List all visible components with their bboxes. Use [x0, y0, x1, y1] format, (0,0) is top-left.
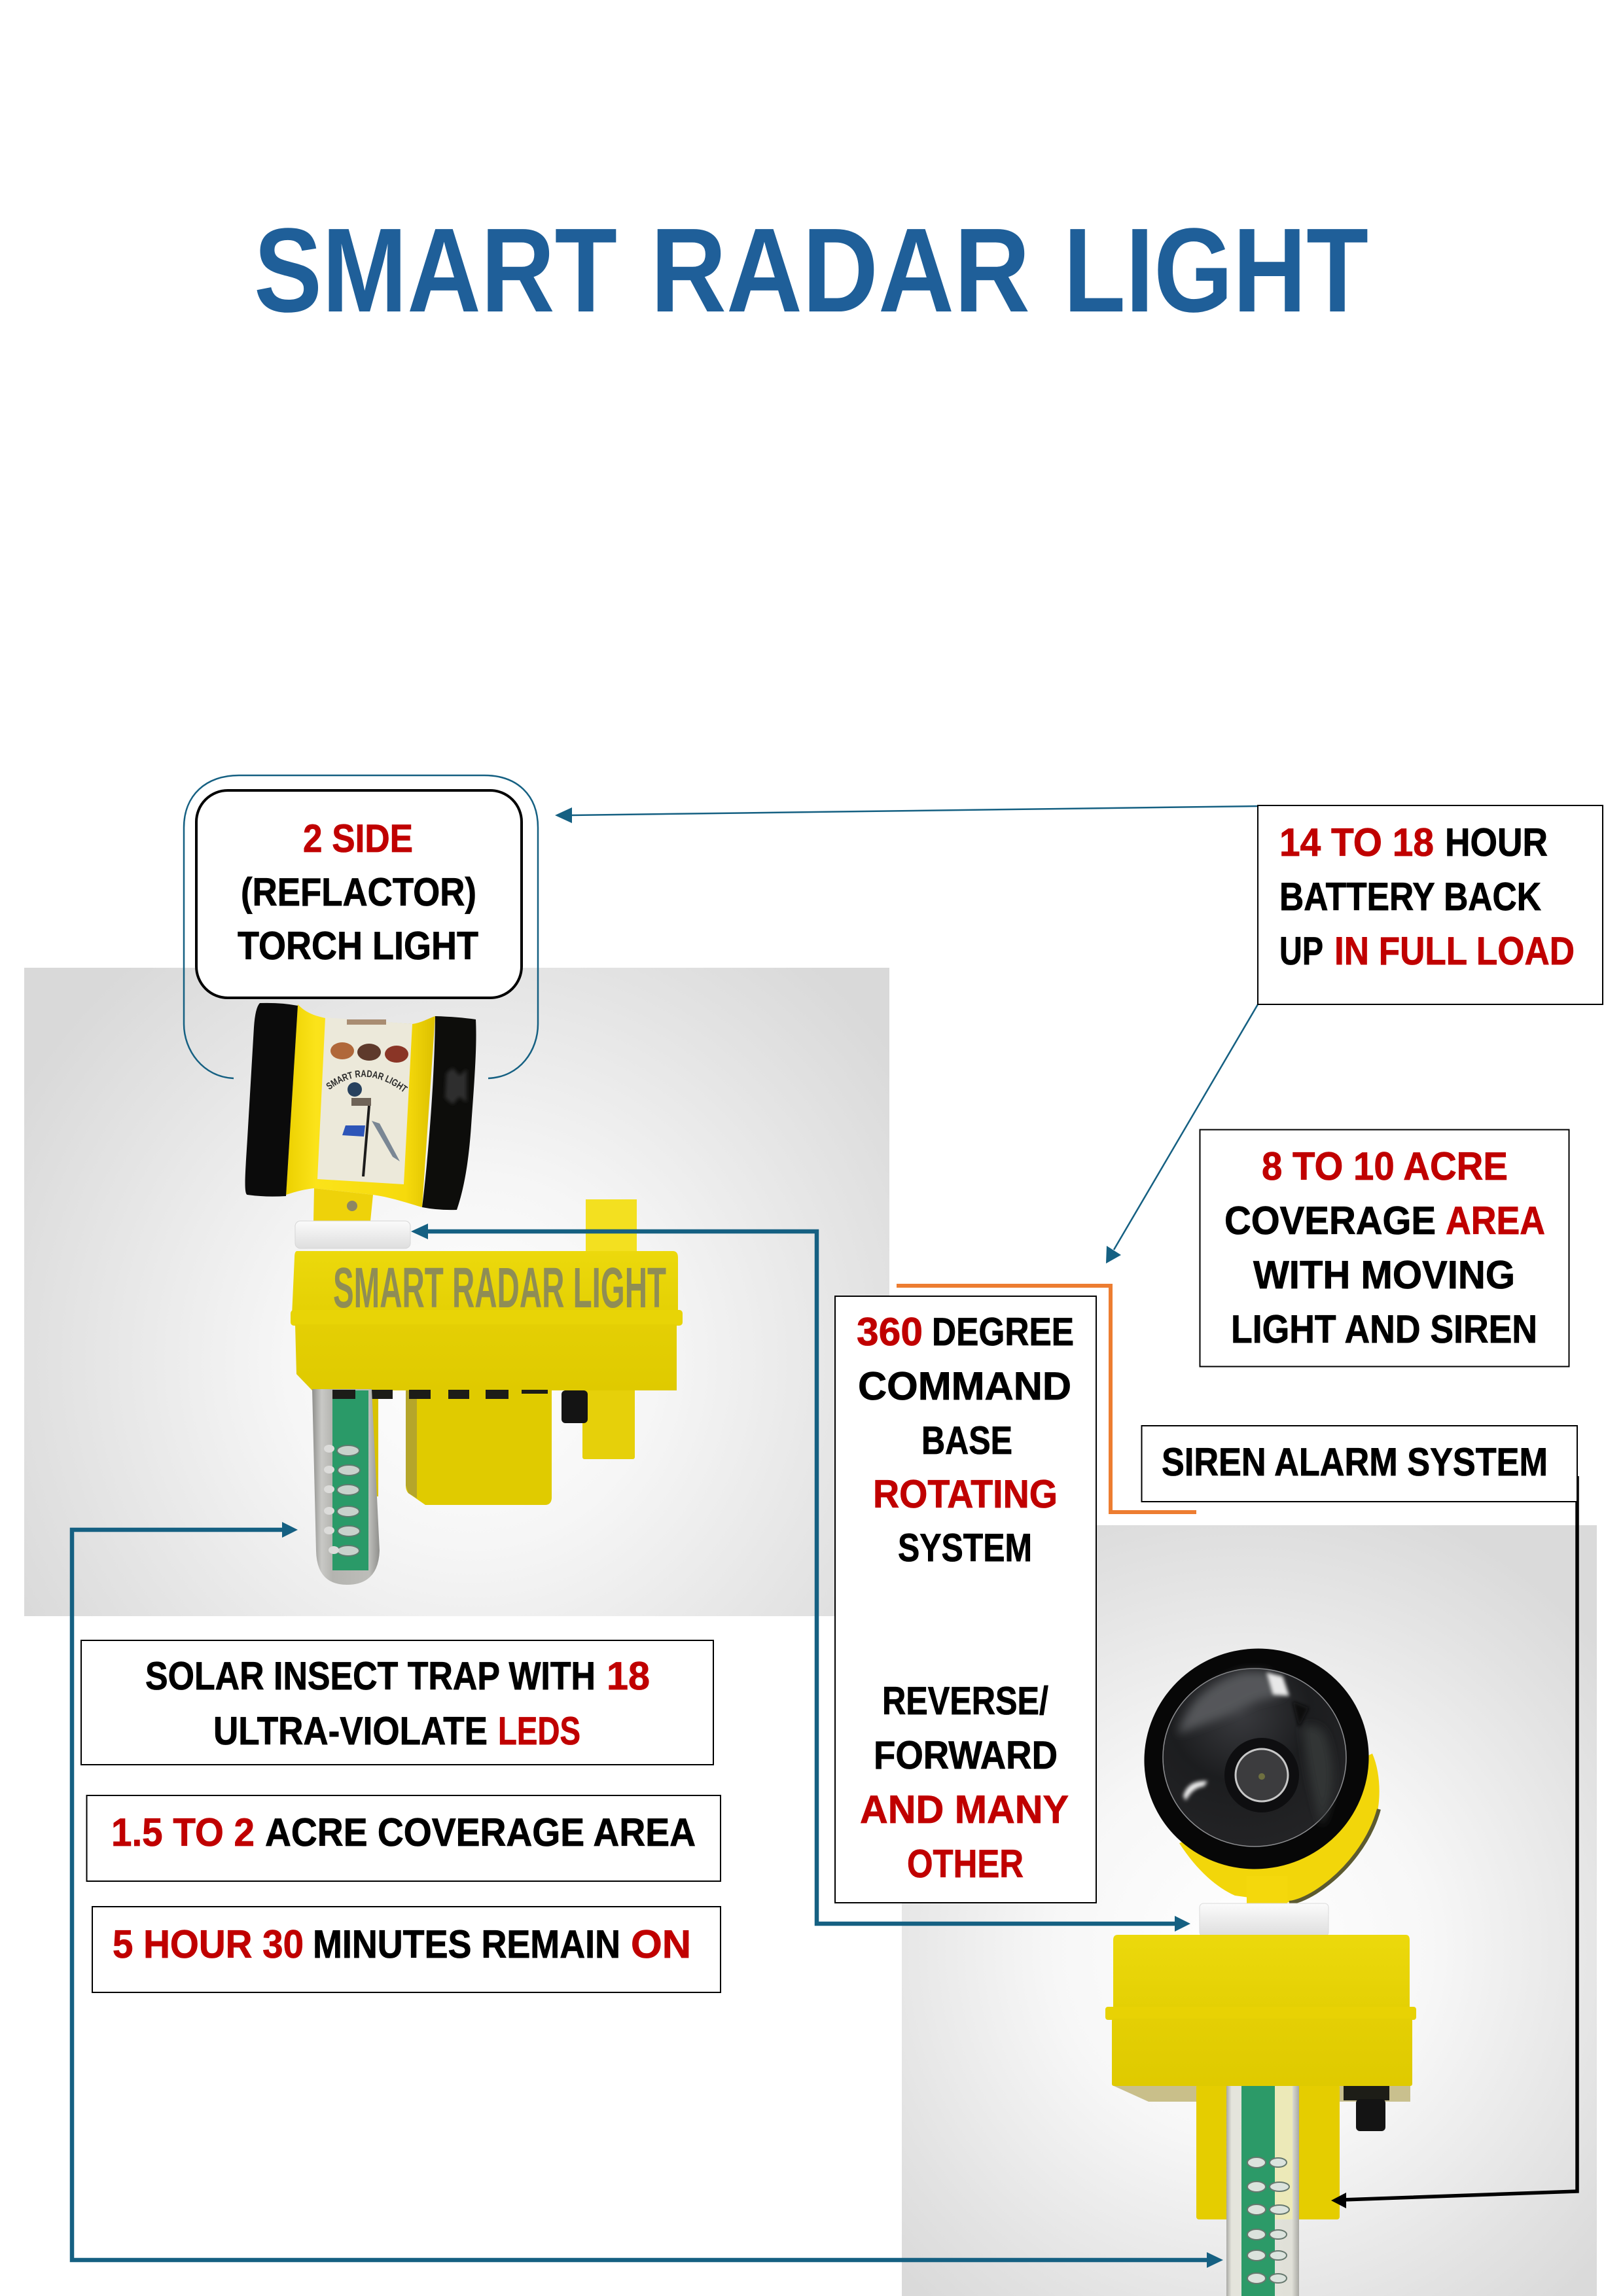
icon: torch yellow body behind lens: [1179, 1754, 1380, 1903]
icon: box lower body: [295, 1324, 677, 1390]
callout: 2 side torch light: TORCH LIGHT: [238, 924, 478, 968]
reflector highlights: [1178, 1672, 1332, 1826]
text box: 360 degree base: BASE: [921, 1419, 1012, 1462]
label: curved text: SMART RADAR LIGHT: [326, 1070, 408, 1091]
icon: pcb strip: [1241, 2086, 1275, 2296]
icon: knob: [1344, 2086, 1389, 2131]
bracket: teal outline around torch callout: [184, 775, 538, 1078]
text box: coverage area: AREA: [1446, 1199, 1545, 1243]
panel: right product photo background: [902, 1525, 1597, 2296]
text box: coverage area: LIGHT AND SIREN: [1231, 1307, 1537, 1351]
text box: remain on time: 5 HOUR 30: [113, 1922, 304, 1966]
icon: led glass tube: [312, 1389, 380, 1585]
text box: remain on time: [92, 1907, 721, 1992]
icon: neck screw: [347, 1201, 357, 1211]
icon: front black rim: [1113, 1617, 1400, 1901]
icon: torch left rim: [245, 1003, 298, 1197]
text box: siren alarm: [1141, 1426, 1577, 1502]
text box: battery backup: BATTERY BACK: [1279, 875, 1541, 919]
callout: 2 side torch light: [196, 790, 522, 998]
text box: 360 degree base: DEGREE: [932, 1310, 1074, 1354]
callout: 2 side torch light: 2 SIDE: [303, 817, 413, 860]
icon: box top: [1113, 1935, 1410, 2009]
text box: battery backup: HOUR: [1445, 821, 1548, 864]
text box: small coverage area: ACRE COVERAGE AREA: [265, 1810, 696, 1854]
title: SMART: [254, 203, 617, 337]
icon: battery box side shade: [406, 1390, 417, 1498]
text box: coverage area: 8 TO 10 ACRE: [1262, 1144, 1508, 1188]
text box: 360 degree base: OTHER: [907, 1842, 1024, 1886]
arrow: siren link: [1331, 1476, 1577, 2208]
label: small bracket: [351, 1098, 371, 1106]
icon: uv leds: [1247, 2157, 1289, 2284]
icon: white rotating disc: [295, 1221, 410, 1248]
text box: 360 degree base: COMMAND: [858, 1364, 1071, 1408]
label: animal pictures: [330, 1042, 408, 1063]
icon: box lower: [1112, 2019, 1412, 2086]
label: top sticker picture: [347, 1019, 386, 1025]
icon: battery box: [406, 1387, 552, 1505]
icon: pcb connector: [332, 1390, 355, 1399]
icon: box rim: [1105, 2007, 1416, 2020]
text box: battery backup: [1258, 805, 1603, 1004]
icon: connectors under box: [330, 1390, 548, 1399]
text box: solar insect trap: [81, 1640, 713, 1765]
text box: coverage area: [1200, 1129, 1569, 1366]
text box: coverage area: COVERAGE: [1224, 1199, 1436, 1243]
text box: 360 degree base: [835, 1296, 1096, 1903]
text box: battery backup: UP: [1279, 929, 1323, 973]
text: lid lettering: SMART RADAR LIGHT: [333, 1256, 666, 1320]
icon: knob: [562, 1390, 588, 1423]
callout: 2 side torch light: (REFLACTOR): [241, 870, 476, 914]
illustration: side view of smart radar light: [245, 1002, 683, 1585]
icon: pcb strip: [332, 1390, 368, 1570]
icon: yellow stem behind tube: [366, 1390, 378, 1496]
icon: neck: [313, 1188, 373, 1221]
rim reflection: [445, 1068, 467, 1104]
arrow: insect trap tube link: [72, 1522, 1223, 2268]
text box: 360 degree base: 360: [857, 1310, 923, 1354]
text box: small coverage area: 1.5 TO 2: [111, 1810, 255, 1854]
icon: body shadow edge: [1289, 1809, 1379, 1903]
text box: solar insect trap: 18: [607, 1654, 650, 1698]
text box: 360 degree base: SYSTEM: [898, 1526, 1032, 1570]
icon: rear pillar upper: [586, 1199, 637, 1258]
text box: 360 degree base: AND MANY: [860, 1788, 1069, 1831]
icon: right under tray: [1340, 2086, 1410, 2102]
icon: neck: [1247, 1876, 1287, 1903]
text box: 360 degree base: ROTATING: [873, 1472, 1058, 1516]
icon: control box lid: [292, 1251, 678, 1315]
label: tray: [342, 1125, 365, 1137]
arrow: battery box to torch: [555, 806, 1258, 823]
text box: small coverage area: [86, 1795, 721, 1881]
title: LIGHT: [1063, 203, 1368, 337]
icon: torch right rim: [422, 1016, 476, 1210]
text box: coverage area: WITH MOVING: [1253, 1253, 1515, 1297]
text box: 360 degree base: REVERSE/: [882, 1679, 1048, 1723]
icon: reflector: [1163, 1669, 1346, 1846]
text box: solar insect trap: LEDS: [498, 1709, 580, 1753]
icon: lens: [1224, 1738, 1299, 1812]
panel: left product photo background: [24, 968, 889, 1616]
text box: solar insect trap: ULTRA-VIOLATE: [213, 1709, 488, 1753]
text box: battery backup: IN FULL LOAD: [1334, 929, 1575, 973]
text box: 360 degree base: FORWARD: [874, 1733, 1058, 1777]
led reflections: [324, 1445, 339, 1554]
arrow: battery box to base: [1106, 1004, 1258, 1263]
icon: uv leds: [337, 1445, 360, 1556]
icon: torch label sticker: [317, 1017, 412, 1184]
text box: remain on time: MINUTES REMAIN: [313, 1922, 620, 1966]
text box: solar insect trap: SOLAR INSECT TRAP WITH: [145, 1654, 596, 1698]
icon: yellow tint through tube: [1275, 2086, 1293, 2219]
icon: left under tray: [1114, 2086, 1196, 2102]
label: small lamp: [348, 1082, 362, 1097]
icon: stem box: [1196, 2084, 1340, 2219]
title: [254, 203, 1368, 337]
label: solar panel: [372, 1121, 400, 1161]
label: pole: [363, 1106, 369, 1176]
title: RADAR: [651, 203, 1030, 337]
text box: battery backup: 14 TO 18: [1279, 821, 1434, 864]
text box: siren alarm: SIREN ALARM SYSTEM: [1162, 1440, 1548, 1484]
icon: led glass tube: [1226, 2086, 1299, 2296]
icon: white rotating disc: [1200, 1903, 1329, 1936]
illustration: front view of smart radar light: [1105, 1617, 1416, 2296]
text box: remain on time: ON: [631, 1922, 691, 1966]
icon: torch body: [286, 1004, 435, 1207]
arrow: rotating base link: [411, 1224, 1190, 1932]
icon: lid rim: [291, 1310, 683, 1326]
icon: rear pillar lower: [582, 1387, 635, 1459]
arrow: orange connector: [897, 1286, 1196, 1512]
